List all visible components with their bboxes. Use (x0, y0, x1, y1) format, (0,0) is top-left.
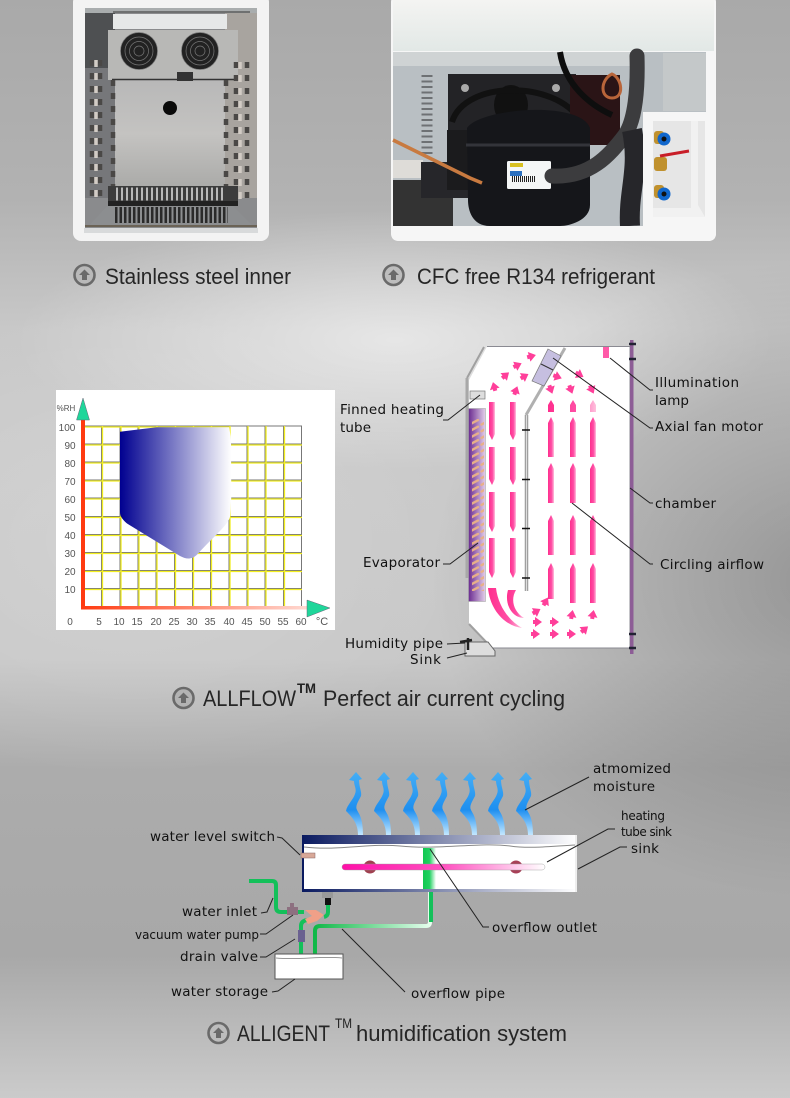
grid lines (84, 426, 302, 606)
caption: ALLFLOW air current cycling (174, 680, 565, 711)
axis labels: 0 (67, 617, 73, 628)
axis labels: °C (316, 616, 328, 628)
fan box (532, 349, 561, 386)
humidification labels: atmomized (593, 761, 671, 777)
inner baffle (525, 415, 528, 591)
illumination lamp (603, 347, 609, 358)
diagram labels: Illumination (655, 375, 739, 391)
axes (81, 418, 85, 609)
tank (302, 835, 577, 892)
humidification labels (135, 761, 672, 1002)
humidification labels: water storage (171, 984, 268, 1000)
airflow arrows up (548, 400, 596, 603)
humidification labels: moisture (593, 779, 655, 795)
axis labels: 100 (59, 423, 76, 434)
airflow turning arrows (488, 350, 599, 639)
axis labels: 10 (64, 585, 76, 596)
axis labels: 40 (64, 531, 76, 542)
diagram labels (340, 375, 764, 668)
right wall (630, 340, 634, 654)
humidification labels: vacuum water pump (135, 928, 259, 942)
atomized moisture arrows (346, 772, 533, 835)
diagram labels: tube (340, 420, 371, 436)
axis labels: 5 (96, 617, 102, 628)
diagram labels: Circling airflow (660, 557, 764, 573)
axis labels: 40 (223, 617, 235, 628)
water level switch (301, 853, 315, 858)
humidification labels: heating (621, 809, 665, 823)
caption: ALLFLOW air current cycling: TM (297, 680, 316, 696)
axis labels: 15 (131, 617, 143, 628)
evaporator (468, 408, 486, 602)
axis labels: 25 (168, 617, 180, 628)
axis labels (57, 404, 328, 628)
caption: ALLFLOW air current cycling: ALLFLOW (203, 686, 296, 711)
diagram labels: Evaporator (363, 555, 440, 571)
heating tube (364, 860, 376, 874)
axis labels: 60 (64, 495, 76, 506)
axis labels: 90 (64, 441, 76, 452)
overflow outlet block (423, 848, 436, 889)
leader lines (443, 358, 653, 658)
axis labels: 30 (64, 549, 76, 560)
caption: CFC free refrigerant: CFC free R134 refrigerant (417, 264, 655, 289)
chart: temperature and humidity range (56, 390, 335, 630)
caption: ALLIGENT humidification system: TM (335, 1015, 352, 1031)
axis labels: 35 (204, 617, 216, 628)
humidification labels: overflow outlet (492, 920, 597, 936)
axis labels: 45 (241, 617, 253, 628)
diagram labels: lamp (655, 393, 689, 409)
water storage tank (275, 954, 343, 979)
vacuum pump and valve (287, 907, 298, 915)
diagram labels: Sink (410, 652, 441, 668)
leader lines (260, 777, 627, 992)
axis labels: 20 (150, 617, 162, 628)
humidification labels: drain valve (180, 949, 258, 965)
axis labels: 55 (277, 617, 289, 628)
diagram labels: Humidity pipe (345, 636, 443, 652)
caption: stainless steel inner: Stainless steel inner (105, 264, 291, 289)
axis labels: %RH (57, 404, 76, 413)
caption: ALLFLOW air current cycling: Perfect air current cycling (323, 686, 565, 711)
axis labels: 10 (113, 617, 125, 628)
chamber body (469, 346, 630, 648)
caption: ALLIGENT humidification system: humidification system (356, 1021, 567, 1046)
photo: stainless steel inner chamber (73, 0, 269, 241)
axis labels: 50 (64, 513, 76, 524)
photo: compressor with CFC free refrigerant (391, 0, 716, 241)
axis labels: 20 (64, 567, 76, 578)
axis labels: 30 (186, 617, 198, 628)
axis labels: 60 (295, 617, 307, 628)
operating range area (120, 427, 231, 558)
airflow arrows down (488, 402, 524, 628)
humidification labels: overflow pipe (411, 986, 505, 1002)
humidification labels: sink (631, 841, 659, 857)
axis labels: 70 (64, 477, 76, 488)
caption: ALLIGENT humidification system: ALLIGENT (237, 1021, 330, 1046)
diagram labels: chamber (655, 496, 716, 512)
axis labels: 80 (64, 459, 76, 470)
diagram labels: Finned heating (340, 402, 444, 418)
humidification labels: water level switch (150, 829, 275, 845)
diagram labels: Axial fan motor (655, 419, 763, 435)
humidification labels: water inlet (182, 904, 257, 920)
caption: ALLIGENT humidification system (208, 1015, 567, 1046)
sink and humidity pipe (460, 638, 495, 656)
pipes (249, 881, 304, 912)
humidification labels: tube sink (621, 825, 672, 839)
diagram: chamber airflow (340, 340, 764, 668)
diagram: humidification system (135, 761, 672, 1002)
axis labels: 50 (259, 617, 271, 628)
